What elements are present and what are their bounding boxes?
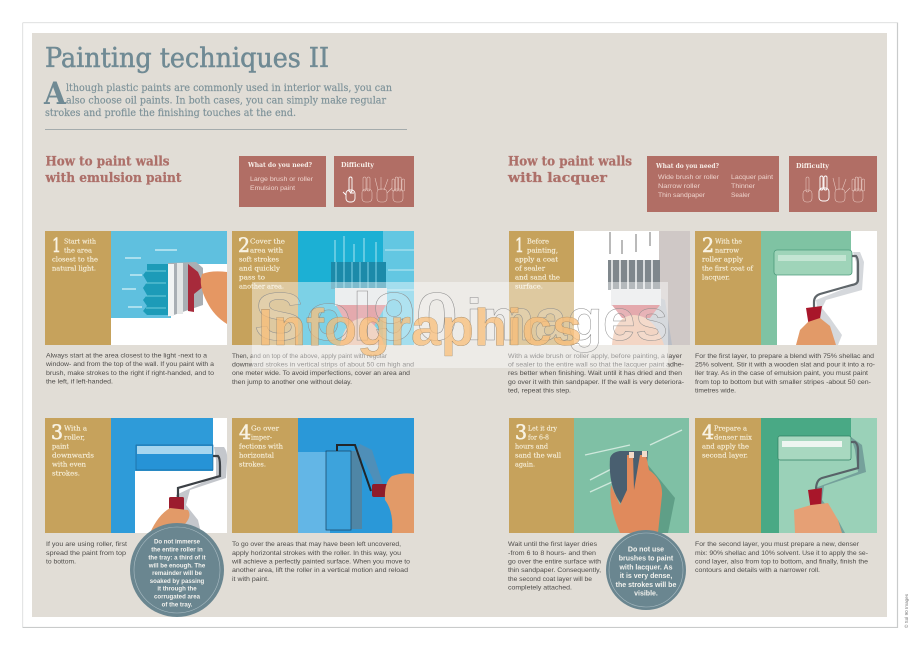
step: emulsion 3: paint [52, 442, 69, 450]
step: emulsion 2: 2 [238, 234, 250, 257]
step: lacquer 2 [695, 231, 877, 394]
illustration: brush and sealer [574, 231, 690, 345]
heading: lacquer: How to paint walls [508, 154, 632, 170]
step: emulsion 4: horizontal [239, 452, 274, 460]
text: Always start at the area closest to the light -next to a [46, 352, 208, 360]
text: ted, repeat this step. [508, 388, 571, 394]
step: lacquer 1: and sand the [515, 274, 560, 282]
text: from top to bottom but with smaller stripes -about 50 cen- [695, 379, 871, 386]
box: what do you need, emulsion: Large brush or roller [250, 176, 313, 183]
text: With a wide brush or roller apply, before painting, a layer [508, 353, 682, 360]
step: emulsion 4 [231, 418, 414, 583]
step: emulsion 3 [45, 418, 227, 566]
text: ller tray. As in the case of emulsion paint, you must paint [695, 370, 868, 377]
callout: lacquer tip [606, 530, 686, 610]
step: lacquer 1: painting, [527, 246, 558, 254]
step: lacquer 3: sand the wall [515, 452, 561, 460]
text: res better when finishing. Wait until it has dried and then [508, 370, 683, 377]
text: go over it with thin sandpaper. If the wall is very deteriora- [508, 379, 684, 386]
box: what do you need, lacquer [647, 156, 779, 212]
icon: hands difficulty two [803, 176, 864, 202]
illustration: brush on blue wall [111, 231, 227, 345]
step: lacquer 1 [508, 231, 690, 394]
text [695, 541, 869, 574]
heading: emulsion paint: How to paint walls [46, 154, 170, 170]
illustration: hand sanding wall [574, 418, 689, 533]
box: difficulty, emulsion [334, 156, 414, 207]
step: lacquer 4: Prepare a [714, 424, 747, 432]
text: another area, lift the roller in a vertical motion and reload [232, 567, 409, 574]
text: contours and details with a narrower roll. [695, 567, 820, 574]
text: Wait until the first layer dries [508, 541, 597, 548]
step: lacquer 1: apply a coat [515, 256, 558, 264]
text: one meter wide. To avoid imperfections, cover an area and [232, 370, 411, 377]
text [508, 353, 684, 394]
intro text: A [43, 76, 67, 112]
step: emulsion 4: fections with [239, 442, 283, 450]
text [508, 541, 602, 592]
step: emulsion 3: roller, [64, 434, 85, 442]
illustration: roller with green paint [761, 231, 877, 345]
text: For the first layer, to prepare a blend with 75% shellac and [695, 353, 875, 360]
text [232, 353, 415, 386]
text: then jump to another one without delay. [232, 379, 352, 386]
intro text: lthough plastic paints are commonly used in interior walls, you can [66, 82, 392, 94]
text [46, 541, 127, 566]
text: to bottom. [46, 558, 76, 566]
heading: lacquer: with lacquer [507, 171, 607, 186]
text: the second coat layer will be [508, 576, 593, 583]
text: thin sandpaper. Consequently, [508, 567, 601, 574]
callout: roller tip: it through the [157, 586, 197, 592]
illustration: brush on cyan wall [298, 231, 414, 345]
text: completely attached. [508, 584, 572, 592]
text: mix: 90% shellac and 10% solvent. Use it to apply the se- [695, 550, 868, 557]
copyright note: © Sol 90 Images [903, 593, 909, 628]
callout: roller tip: of the tray. [162, 602, 193, 608]
step: lacquer 4: 4 [702, 421, 714, 444]
text: For the second layer, you must prepare a new, denser [695, 541, 859, 548]
illustration: roller second coat [761, 418, 877, 533]
watermark: Sol90 [254, 279, 458, 355]
step: lacquer 2: the first coat of [702, 264, 754, 272]
box: difficulty, lacquer: Difficulty [796, 163, 830, 170]
text: 25% solvent. Stir it with a wooden slat and pour it into a ro- [695, 362, 875, 368]
step: lacquer 3: again. [515, 460, 535, 468]
step: emulsion 4: Go over [251, 424, 280, 432]
text: timetres wide. [695, 388, 736, 394]
icon: hands difficulty one [343, 177, 404, 202]
step: lacquer 3: hours and [515, 442, 548, 450]
callout: lacquer tip: it is very dense, [620, 573, 672, 580]
text: go over the entire surface with [508, 558, 602, 566]
text: window- and from the top of the wall. If you paint with a [45, 361, 215, 368]
box: what do you need, emulsion [239, 156, 326, 207]
box: what do you need, lacquer: Thinner [731, 183, 755, 190]
step: lacquer 4: and apply the [702, 442, 749, 450]
step: lacquer 1: Before [527, 238, 549, 246]
step: lacquer 3: Let it dry [528, 424, 557, 432]
watermark: Infographics [258, 299, 582, 357]
callout: lacquer tip: visible. [634, 590, 658, 598]
step: lacquer 2: narrow [715, 246, 739, 254]
step: lacquer 2: 2 [702, 234, 714, 257]
step: lacquer 3 [508, 418, 689, 592]
step: emulsion 3: With a [64, 424, 87, 432]
callout: roller tip: remainder will be [152, 570, 202, 577]
text: Then, and on top of the above, apply paint with regular [232, 353, 387, 360]
step: emulsion 1: closest to the [52, 256, 98, 264]
step: emulsion 3: 3 [51, 421, 63, 444]
step: lacquer 1: surface. [515, 282, 543, 290]
box: what do you need, lacquer: Lacquer paint [731, 174, 773, 181]
illustration: roller horizontal strokes [298, 418, 414, 533]
text: apply horizontal strokes with the roller. In this way, you [232, 550, 402, 557]
box: difficulty, emulsion: Difficulty [341, 162, 375, 169]
heading: emulsion paint: with emulsion paint [45, 171, 182, 186]
heading: lacquer [507, 154, 632, 186]
callout: lacquer tip: the strokes will be [616, 582, 676, 589]
illustration: roller on blue wall [111, 418, 227, 533]
watermark [252, 279, 668, 368]
step: emulsion 4: imper- [251, 434, 272, 442]
step: emulsion 1 [45, 231, 227, 386]
callout: roller tip: the tray: a third of it [148, 554, 206, 562]
heading: emulsion paint [45, 154, 182, 186]
intro text: also choose oil paints. In both cases, you can simply make regular [66, 94, 387, 106]
step: emulsion 3: strokes. [52, 470, 80, 478]
step: lacquer 4 [695, 418, 877, 574]
text [695, 353, 875, 394]
callout: lacquer tip: with lacquer. As [618, 564, 673, 572]
callout: roller tip: corrugated area [154, 594, 201, 600]
text: the left, if left-handed. [46, 378, 113, 386]
step: lacquer 2: With the [715, 238, 742, 246]
title: Painting techniques II [45, 43, 329, 74]
intro text: strokes and profile the finishing touches at the end. [45, 107, 296, 119]
callout: roller tip: Do not immerse [154, 538, 201, 546]
callout: roller tip: will be enough. The [148, 562, 206, 570]
step: emulsion 2: another area. [239, 282, 284, 290]
step: emulsion 1: natural light. [52, 264, 96, 272]
text: -from 6 to 8 hours- and then [508, 550, 597, 557]
step: emulsion 2: area with [250, 246, 283, 254]
text: brush, make strokes to the right if right-handed, and to [46, 370, 215, 377]
text: cond layer, also from top to bottom, and finally, finish the [695, 558, 869, 566]
text: If you are using roller, first [46, 541, 127, 548]
step: emulsion 2: Cover the [250, 238, 285, 246]
text: it with paint. [232, 576, 269, 583]
text [45, 352, 215, 386]
step: lacquer 3: for 6-8 [528, 434, 549, 442]
callout: roller tip [130, 523, 224, 617]
step: emulsion 3: with even [52, 460, 86, 468]
step: lacquer 4: second layer. [702, 452, 748, 460]
step: emulsion 1: the area [64, 246, 92, 254]
text: To go over the areas that may have been left uncovered, [232, 541, 401, 548]
step: emulsion 4: 4 [239, 421, 251, 444]
callout: roller tip: the entire roller in [151, 546, 203, 554]
text: of sealer to the entire wall so that the lacquer paint adhe- [508, 362, 684, 368]
step: lacquer 1: of sealer [515, 264, 546, 272]
step: lacquer 4: denser mix [714, 434, 752, 442]
text: will achieve a perfectly painted surface. When you move to [231, 558, 411, 566]
box: what do you need, lacquer: Thin sandpaper [658, 192, 705, 199]
step: emulsion 2: pass to [239, 274, 265, 282]
step: emulsion 4: strokes. [239, 460, 266, 468]
box: what do you need, emulsion: What do you need? [247, 162, 312, 169]
text [231, 541, 411, 583]
box: what do you need, lacquer: Sealer [731, 192, 750, 199]
step: lacquer 3: 3 [515, 421, 527, 444]
callout: roller tip: soaked by passing [150, 578, 205, 585]
step: emulsion 3: downwards [52, 452, 94, 460]
text: downward strokes in vertical strips of about 50 cm high and [232, 362, 415, 368]
step: emulsion 2: soft strokes [239, 256, 279, 264]
step: lacquer 2: lacquer. [702, 274, 730, 282]
callout: lacquer tip: Do not use [628, 546, 664, 554]
step: emulsion 1: 1 [52, 234, 61, 257]
text: spread the paint from top [46, 550, 127, 557]
box: what do you need, emulsion: Emulsion paint [250, 185, 295, 192]
step: emulsion 2: and quickly [239, 264, 280, 272]
step: lacquer 1: 1 [515, 234, 524, 257]
callout: lacquer tip: brushes to paint [619, 556, 674, 562]
intro text [43, 76, 392, 119]
box: what do you need, lacquer: Wide brush or roller [658, 174, 719, 181]
box: what do you need, lacquer: Narrow roller [658, 183, 700, 190]
box: difficulty, lacquer [789, 156, 877, 212]
step: emulsion 1: Start with [64, 238, 96, 246]
step: emulsion 2 [232, 231, 415, 386]
watermark: images [466, 288, 668, 353]
step: lacquer 2: roller apply [702, 256, 743, 264]
box: what do you need, lacquer: What do you need? [655, 163, 719, 170]
